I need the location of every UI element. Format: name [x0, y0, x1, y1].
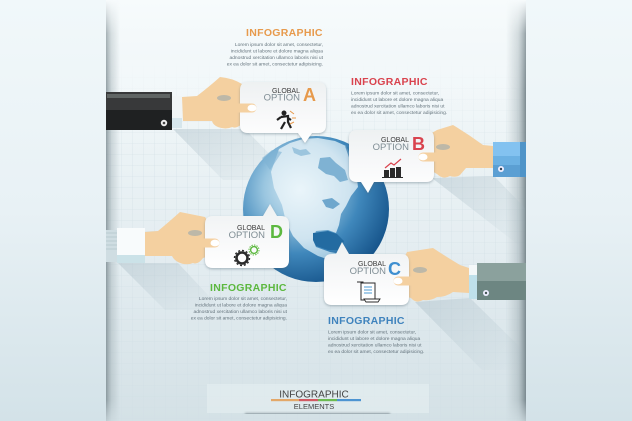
label D — [229, 222, 283, 242]
label B: GLOBAL — [381, 137, 409, 144]
text block B: incididunt ut labore et dolore magna aliqua — [351, 97, 443, 103]
thumb D — [170, 238, 215, 248]
finger gap B — [436, 144, 450, 150]
sleeve B — [493, 142, 526, 177]
label D: D — [270, 222, 283, 242]
long shadows of hands — [118, 129, 525, 370]
text block A — [227, 27, 324, 68]
footer title banner: INFOGRAPHIC — [279, 390, 349, 400]
text block D — [191, 282, 288, 322]
text block D: Lorem ipsum dolor sit amet, consectetur, — [199, 296, 287, 302]
icon: scroll — [357, 282, 380, 302]
label D: OPTION — [229, 230, 265, 241]
text block C — [328, 315, 424, 355]
text block D: ex ea dolor sit amet, consectetur adipisicing. — [191, 316, 287, 322]
text block D: INFOGRAPHIC — [210, 282, 287, 294]
label A: A — [303, 85, 316, 105]
sleeve D — [106, 230, 118, 262]
panel: option C — [324, 242, 526, 305]
text block A: INFOGRAPHIC — [246, 27, 323, 39]
label B — [373, 134, 425, 154]
panel: option B — [349, 125, 526, 193]
icon: gears — [234, 245, 259, 266]
icon: bar chart — [382, 159, 403, 178]
text block B — [351, 76, 447, 116]
text block D: adnostrud xercitation ullamco laboris nisi ut — [193, 309, 288, 315]
cuff D — [117, 228, 145, 263]
text block A: incididunt ut labore et dolore magna aliqua — [231, 48, 323, 54]
label A: OPTION — [264, 92, 300, 104]
icon: running man — [277, 110, 296, 129]
card B — [349, 130, 434, 193]
cuff A — [172, 96, 182, 128]
thumb B — [423, 152, 480, 162]
text block B: adnostrud xercitation ullamco laboris nisi ut — [351, 104, 445, 110]
card C — [324, 242, 409, 305]
label D: GLOBAL — [237, 225, 265, 232]
label B: OPTION — [373, 142, 409, 153]
text block B: ex ea dolor sit amet, consectetur adipisicing. — [351, 110, 447, 116]
continents — [262, 138, 366, 262]
footer title banner: ELEMENTS — [294, 402, 334, 411]
thumb C — [398, 276, 436, 286]
finger gap D — [188, 230, 202, 236]
text block C: Lorem ipsum dolor sit amet, consectetur, — [328, 330, 416, 336]
sleeve C — [477, 263, 526, 300]
text block A: adnostrud xercitation ullamco laboris nisi ut — [229, 55, 324, 61]
label C: GLOBAL — [358, 261, 386, 268]
label C — [350, 259, 401, 279]
text block C: INFOGRAPHIC — [328, 315, 405, 327]
footer title banner — [207, 384, 429, 414]
text block C: ex ea dolor sit amet, consectetur adipisicing. — [328, 349, 424, 355]
text block D: incididunt ut labore et dolore magna aliqua — [195, 302, 287, 308]
label A — [264, 85, 316, 105]
label A: GLOBAL — [272, 88, 300, 95]
central panel — [106, 0, 526, 421]
finger gap C — [413, 267, 427, 273]
thumb A — [200, 104, 252, 112]
panel: option D — [106, 204, 289, 268]
label C: C — [388, 259, 401, 279]
label B: B — [412, 134, 425, 154]
card A — [240, 82, 326, 143]
hand D — [145, 212, 210, 264]
card D — [205, 204, 289, 268]
text block B: Lorem ipsum dolor sit amet, consectetur, — [351, 90, 439, 96]
text block C: adnostrud xercitation ullamco laboris nisi ut — [328, 342, 422, 348]
sleeve A — [106, 92, 172, 130]
text block C: incididunt ut labore et dolore magna aliqua — [328, 336, 420, 342]
text block B: INFOGRAPHIC — [351, 76, 428, 88]
text block A: ex ea dolor sit amet, consectetur adipisicing. — [227, 62, 323, 68]
hand B — [430, 125, 493, 178]
panel: option A — [106, 77, 326, 143]
hand C — [404, 248, 469, 302]
text block A: Lorem ipsum dolor sit amet, consectetur, — [235, 42, 323, 48]
cuff C — [469, 265, 477, 299]
finger gap A — [217, 95, 231, 101]
hand A — [182, 77, 246, 128]
label C: OPTION — [350, 266, 386, 277]
globe — [243, 136, 389, 282]
